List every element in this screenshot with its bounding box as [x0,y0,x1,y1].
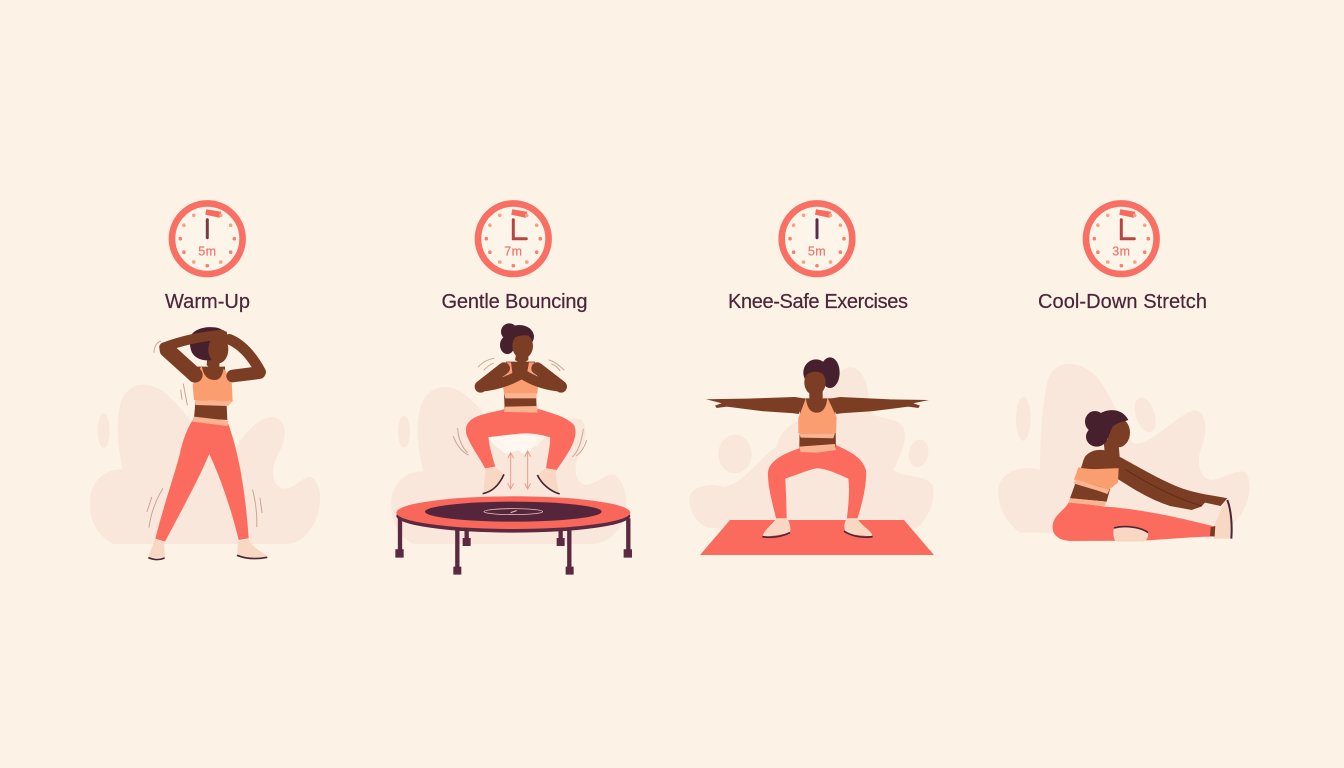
icon: 7 minute clock: 7m [504,245,522,259]
background blob [90,385,320,544]
torso [504,362,537,409]
head and hair [809,390,823,403]
background blob [391,387,626,544]
heading: knee-safe exercises: Knee-Safe Exercises [728,291,908,313]
sports top [193,365,233,401]
heading: gentle bouncing: Gentle Bouncing [442,291,588,313]
shoes [149,539,165,558]
torso [1070,450,1118,502]
arms [706,397,805,414]
sports top [1074,467,1119,490]
neck [1103,438,1120,460]
trampoline mat [425,502,602,522]
shoes [763,518,790,537]
motion arrows [508,451,531,489]
panel: cool-down stretch [998,203,1250,542]
head and hair [1085,411,1105,432]
icon: 5 minute clock: 5m [198,245,216,259]
motion lines [147,341,262,527]
heading: cool-down stretch: Cool-Down Stretch [1038,291,1207,313]
leggings [768,445,866,521]
leggings [466,409,576,470]
trampoline legs [400,518,628,568]
arms [1083,451,1227,510]
sports top [503,362,538,393]
torso [799,398,836,448]
panel: gentle bouncing [391,203,632,575]
icon: 5 minute clock [782,203,852,274]
illustration: woman bouncing on trampoline [391,323,632,575]
sports top [798,397,837,433]
icon: 5 minute clock: 5m [808,245,826,259]
gap highlight [488,435,538,455]
leggings [155,420,249,542]
icon: 5 minute clock [172,203,243,274]
neck and head [207,357,220,372]
background blob [998,364,1250,533]
panel: knee-safe exercises [689,203,934,555]
icon: 3 minute clock: 3m [1112,245,1130,259]
panel: warm-up [90,203,320,560]
arms [167,350,195,375]
shoes [483,467,504,493]
leggings [1053,502,1215,541]
background blob [689,367,934,528]
torso [194,367,227,420]
head and hair [515,355,528,364]
arms [481,368,504,387]
trampoline rim [396,499,630,533]
yoga mat [700,520,934,555]
illustration: woman warming up [90,327,320,560]
heading: warm-up: Warm-Up [165,291,250,313]
illustration: woman squatting on mat [689,357,934,555]
icon: 7 minute clock [478,203,549,274]
icon: 3 minute clock [1086,203,1157,274]
illustration: woman stretching to toes [998,364,1250,542]
motion lines [453,358,587,457]
shoes [1214,499,1231,539]
